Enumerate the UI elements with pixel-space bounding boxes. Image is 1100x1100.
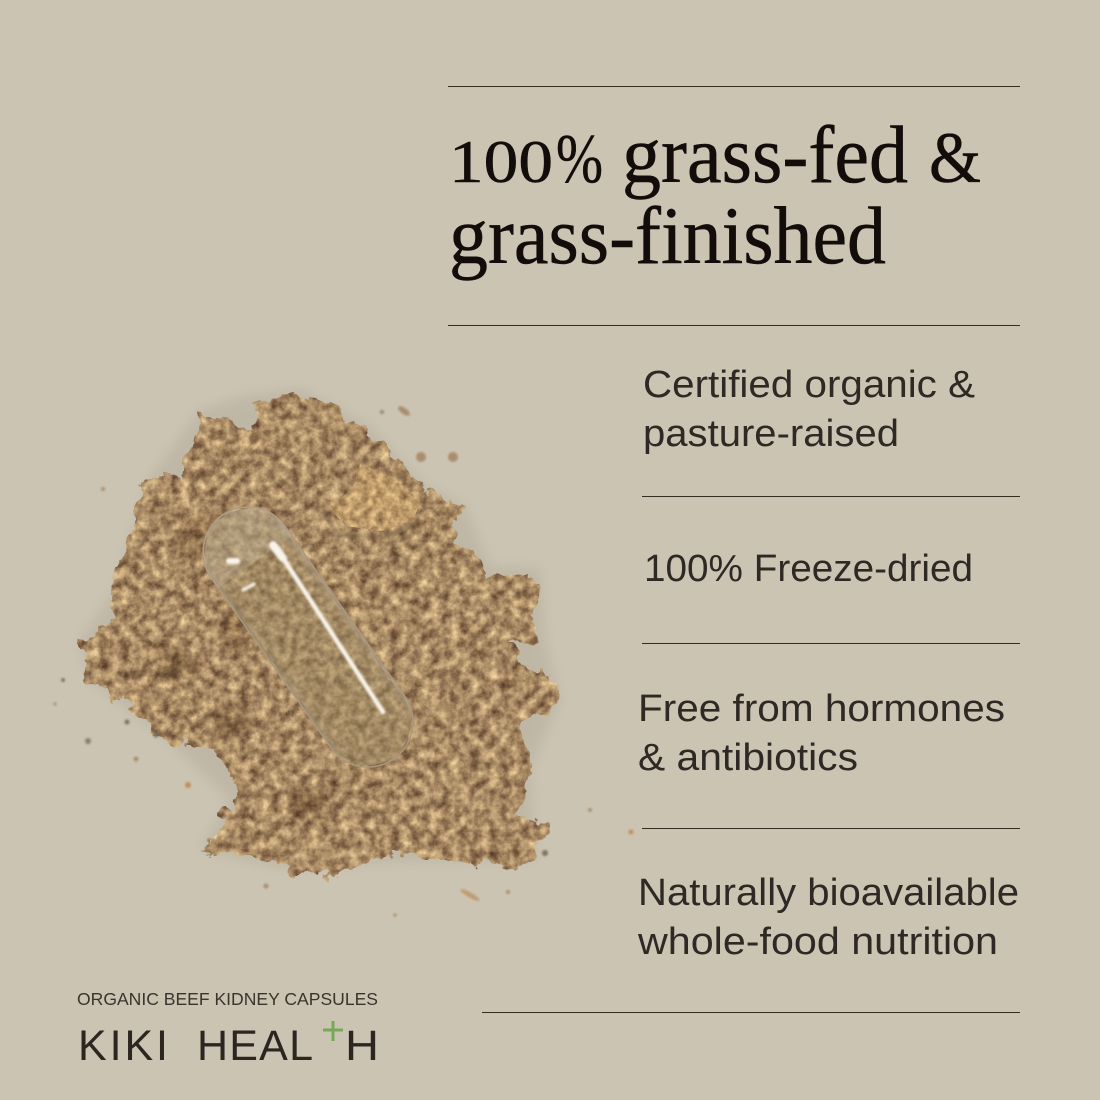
capsule highlights [229, 545, 383, 712]
title: grass-finished [449, 190, 886, 281]
text block: freeze-dried: 100% Freeze-dried [644, 548, 973, 590]
text block: bioavailable nutrition [637, 872, 1019, 963]
logo: Kiki Health: HEAL [197, 1022, 313, 1070]
text block: certified organic: pasture-raised [643, 413, 899, 455]
logo: Kiki Health: H [345, 1022, 379, 1070]
text block: certified organic: Certified organic & [643, 364, 975, 406]
text block: free from hormones: Free from hormones [638, 688, 1005, 730]
product label: ORGANIC BEEF KIDNEY CAPSULES [77, 989, 378, 1009]
title: 100 [449, 129, 553, 195]
title: & [929, 118, 981, 198]
powder shadow [80, 388, 560, 868]
text block: free from hormones: & antibiotics [638, 737, 858, 779]
capsule end cap [185, 489, 292, 588]
icon: green plus [323, 1021, 343, 1041]
title: grass-fed [622, 109, 908, 200]
logo: Kiki Health: KIKI [78, 1022, 168, 1070]
title: % [556, 121, 603, 198]
loose crumbs [53, 405, 633, 917]
rule: top of heading [448, 86, 1020, 88]
capsule contents [188, 492, 428, 782]
text block: bioavailable nutrition: whole-food nutrition [637, 921, 998, 963]
powder chunk [328, 464, 420, 531]
title [449, 109, 981, 281]
capsule shell [185, 489, 431, 785]
powder pile with capsule [53, 388, 633, 917]
capsule [185, 489, 431, 785]
text block: certified organic [643, 364, 975, 455]
powder mass [78, 391, 559, 879]
powder chunk shadow [324, 510, 420, 537]
logo: Kiki Health [78, 1021, 379, 1070]
rule: bottom of heading [448, 324, 1020, 326]
text block: free from hormones [638, 688, 1005, 779]
text block: bioavailable nutrition: Naturally bioavailable [638, 872, 1019, 914]
